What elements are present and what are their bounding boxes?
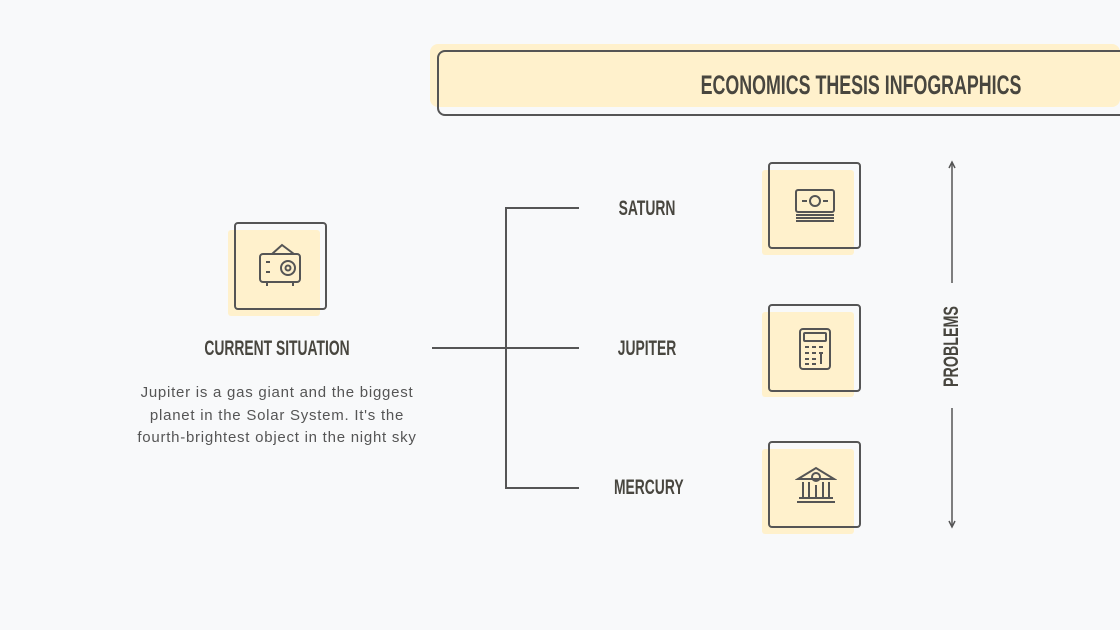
text block: fourth-brightest object in the night sky xyxy=(137,429,417,446)
text block: planet in the Solar System. It's the xyxy=(150,406,404,424)
label: mercury: MERCURY xyxy=(614,476,684,499)
text block: Jupiter is a gas giant and the biggest xyxy=(141,384,413,401)
heading: current situation: CURRENT SITUATION xyxy=(204,337,350,360)
connector lines xyxy=(432,207,579,489)
icon: bank xyxy=(762,441,861,534)
icon: calculator xyxy=(762,304,861,397)
title: ECONOMICS THESIS INFOGRAPHICS xyxy=(701,70,1021,100)
label: jupiter: JUPITER xyxy=(618,337,676,360)
text block xyxy=(137,384,417,446)
header banner xyxy=(430,44,1120,116)
label: problems: PROBLEMS xyxy=(940,306,963,387)
icon: money xyxy=(762,162,861,255)
label: saturn: SATURN xyxy=(619,197,675,220)
icon: safe xyxy=(228,222,327,316)
arrow: problems axis xyxy=(940,160,963,528)
